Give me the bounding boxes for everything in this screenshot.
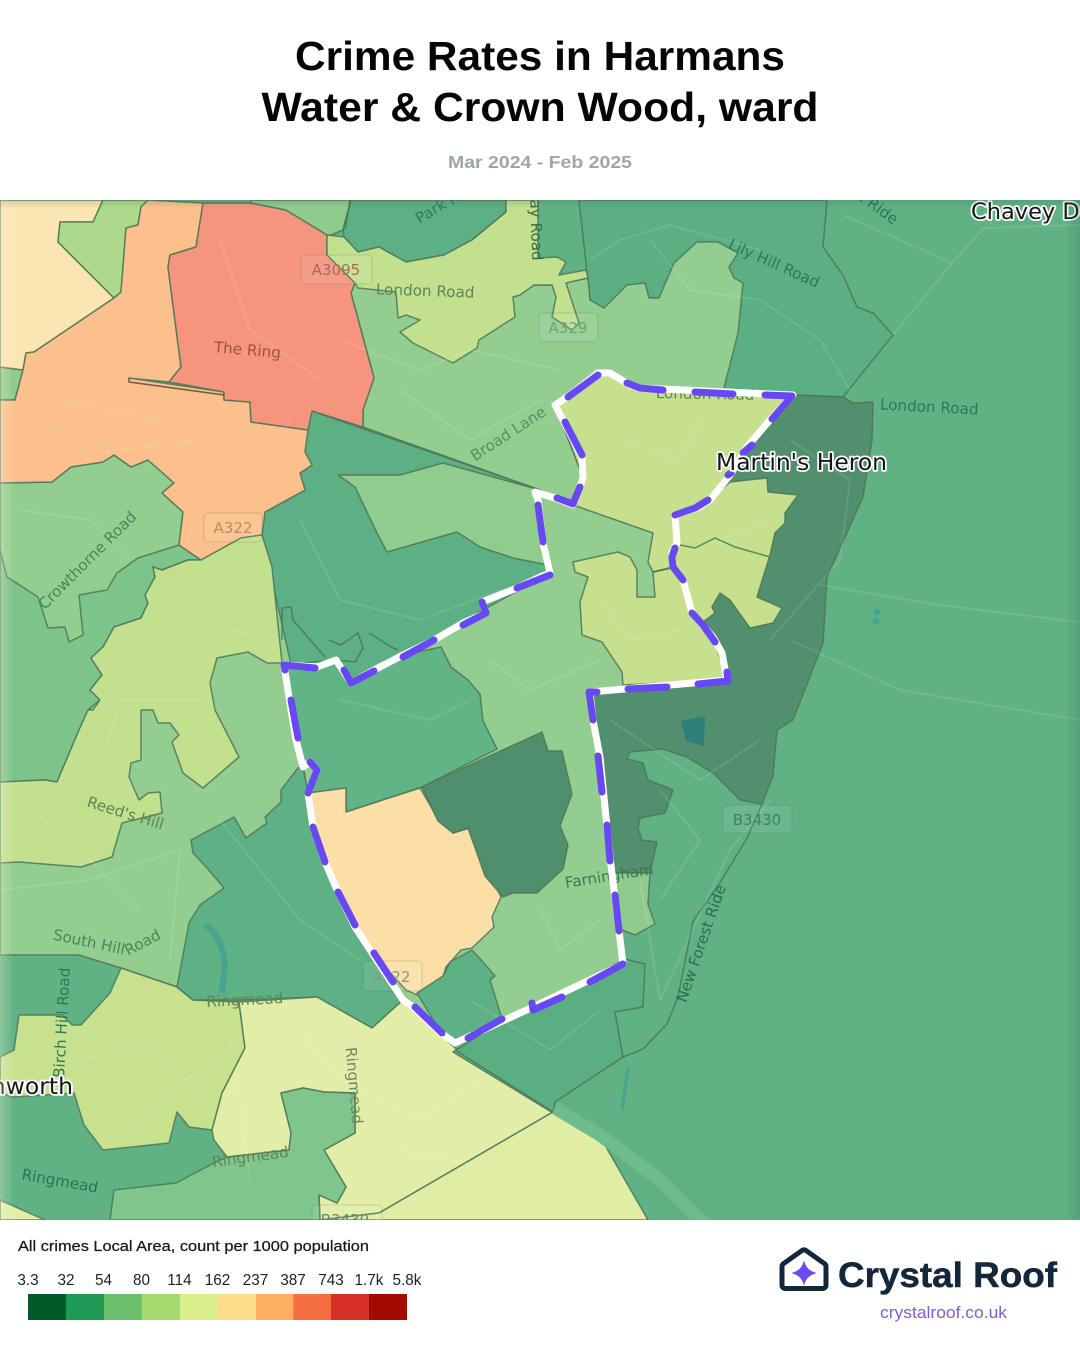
road shield: A3095: A3095	[312, 261, 360, 279]
label: Park Road: Park Road	[412, 174, 487, 227]
legend	[17, 1239, 422, 1320]
road shield: A3095	[301, 255, 372, 284]
map areas	[0, 200, 893, 1220]
label: Broad Lane: Broad Lane	[467, 403, 549, 465]
label: Ringmead vertical: Ringmead	[342, 1046, 366, 1125]
label: Birch Hill Road: Birch Hill Road	[50, 967, 74, 1078]
boundary and rail lines	[129, 200, 770, 1112]
road shield: B3430: B3430	[733, 811, 781, 829]
map edge shading	[0, 200, 1080, 1220]
label: Reed's Hill: Reed's Hill	[85, 793, 166, 833]
legend values	[17, 1272, 422, 1289]
legend values: 1.7k	[355, 1272, 384, 1289]
label: Road: Road	[122, 926, 164, 959]
ward boundary: white line	[284, 373, 793, 1043]
label: New Forest Ride: New Forest Ride	[673, 882, 730, 1005]
logo wordmark: Crystal Roof	[838, 1256, 1057, 1295]
logo url: crystalroof.co.uk	[880, 1304, 1008, 1322]
icon: house with star	[782, 1250, 826, 1288]
road shield: B3430	[723, 805, 792, 833]
subtitle: date range: Mar 2024 - Feb 2025	[448, 152, 632, 172]
logo: Crystal Roof	[782, 1250, 1057, 1322]
label: Ringmead north: Ringmead	[206, 989, 284, 1011]
label: London Road: London Road	[376, 280, 475, 302]
legend values: 743	[318, 1272, 344, 1289]
title	[262, 33, 818, 130]
label: London Road ward: London Road	[656, 384, 755, 404]
legend values: 162	[205, 1272, 230, 1289]
legend values: 114	[167, 1272, 192, 1289]
label: Crowthorne Road: Crowthorne Road	[35, 508, 140, 613]
label: Ringmead centre: Ringmead	[211, 1143, 290, 1171]
legend values: 3.3	[17, 1272, 39, 1289]
road shield: A322 north	[204, 513, 262, 542]
road shield: A322 north: A322	[214, 519, 252, 537]
label: The Ring: The Ring	[212, 338, 282, 362]
water features	[205, 608, 880, 1110]
label: Forest Ride: Forest Ride	[822, 164, 902, 228]
place label: Martin's Heron: Martin's Heron	[716, 448, 887, 476]
road shield: A329	[539, 313, 598, 342]
ward boundary: purple dashes	[284, 375, 792, 1038]
legend values: 32	[57, 1272, 75, 1289]
label: Farningham: Farningham	[564, 860, 655, 892]
title: Water & Crown Wood, ward	[262, 84, 818, 130]
road shield: B3430 bottom: B3430	[321, 1211, 369, 1229]
legend values: 237	[243, 1272, 268, 1289]
choropleth map	[0, 164, 1080, 1240]
road shield: A322 south: A322	[372, 968, 410, 986]
road shield: A322 south	[363, 961, 422, 991]
road shield: A329: A329	[549, 319, 587, 337]
legend values: 54	[95, 1272, 112, 1289]
road network	[0, 215, 1080, 1180]
legend values: 387	[280, 1272, 306, 1289]
label: South Hill: South Hill	[51, 926, 127, 959]
label: London Road east: London Road	[880, 395, 979, 419]
road labels	[20, 164, 979, 1233]
title: Crime Rates in Harmans	[295, 33, 785, 79]
legend colour scale	[28, 1294, 407, 1320]
legend values: 80	[133, 1272, 150, 1289]
label: Ringmead south-west: Ringmead	[20, 1166, 99, 1197]
legend values: 5.8k	[393, 1272, 422, 1289]
road shield: B3430 bottom	[312, 1204, 382, 1220]
pale band along forest edge	[552, 1102, 709, 1220]
label: Lily Hill Road: Lily Hill Road	[726, 235, 822, 292]
label: Bay Road: Bay Road	[526, 189, 546, 261]
legend heading: All crimes Local Area, count per 1000 population	[18, 1239, 369, 1255]
